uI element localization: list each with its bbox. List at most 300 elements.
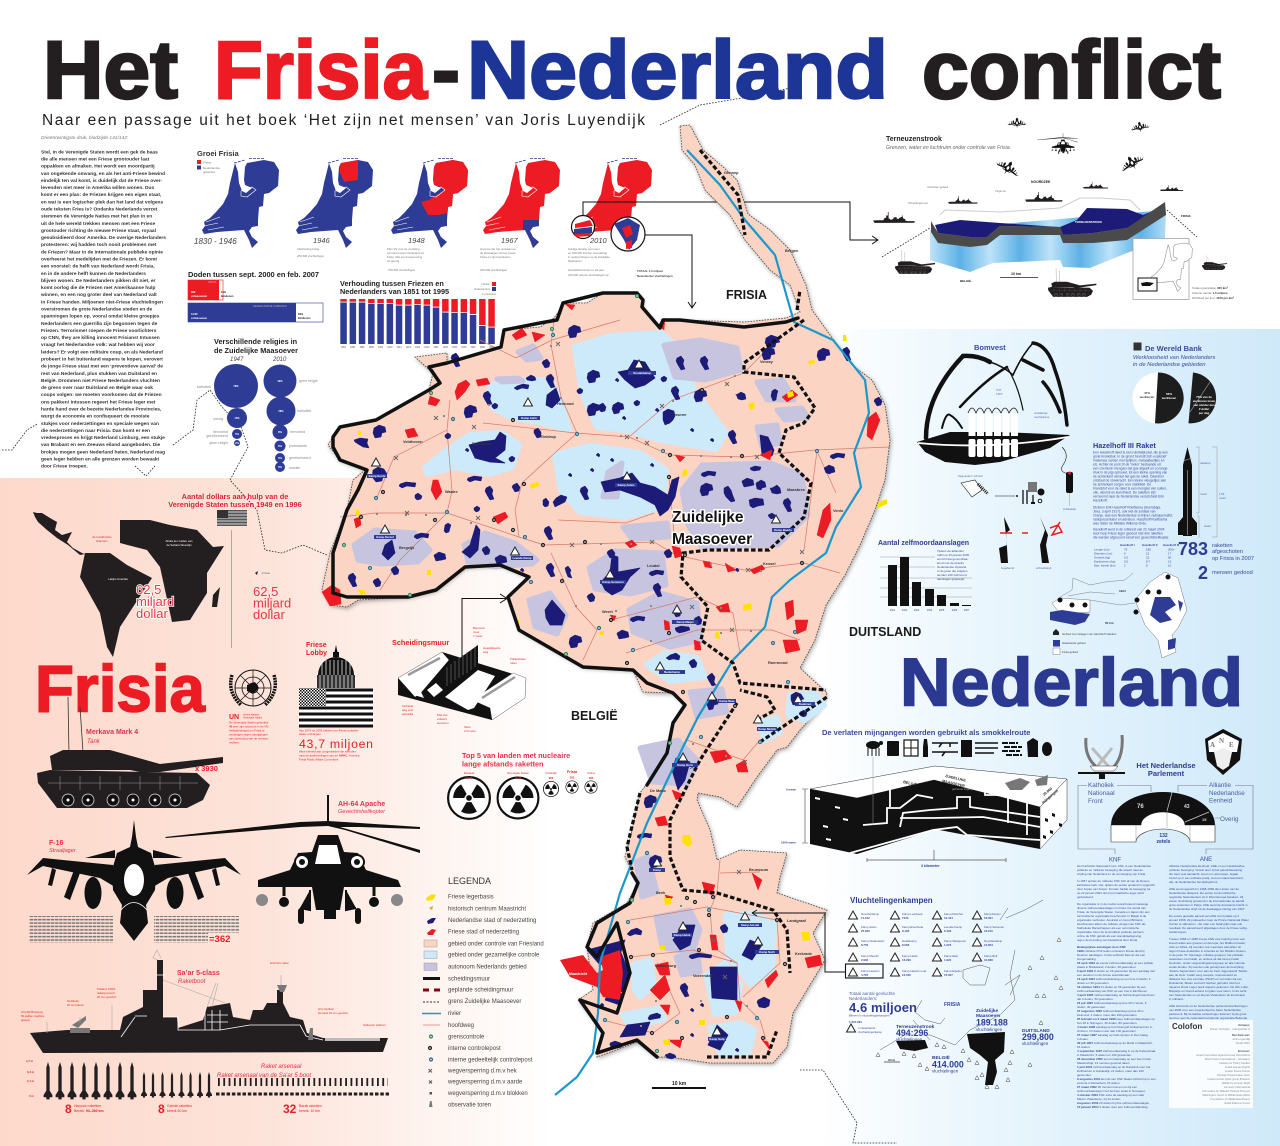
stat: Zuidelijke Maasoever: Maasoever: [976, 1013, 1001, 1019]
wall labels: sensoren: [437, 721, 449, 725]
table: rocket specs: 90: [1168, 556, 1172, 560]
label: UN: Verenigde Naties: [243, 716, 263, 720]
label 1967: de Zesdaagse Oorlog tussen: [480, 251, 516, 255]
text: KNF column: Maxim Vlaanderen, bij 21 doden.: [1077, 1097, 1121, 1101]
table: rocket specs: 6: [1124, 552, 1126, 556]
axis labels: 2007: [964, 609, 970, 612]
year axis: 1940: [452, 347, 458, 349]
text: ANE column: [1168, 864, 1249, 1020]
counts: missiles: bereik: 10 km: [299, 1109, 320, 1113]
chart: Aantal zelfmoordaanslagen: [878, 540, 972, 612]
year axis: 1990: [480, 347, 486, 349]
bubbles 1947: [214, 364, 258, 446]
bubble labels: gereformeerd: [289, 456, 311, 460]
subheading: unemployment: Werkloosheid van Nederlanders: [1133, 355, 1215, 361]
text: KNF column: 1989 militante KNF leden ontvoeren Friese duid bij: [1077, 949, 1145, 953]
stat: Zuidelijke Maasoever: [976, 1008, 1008, 1032]
ship callouts: helikopter platform: [363, 1023, 387, 1027]
text: ANE column: dat, de Nederlandse bevrijdingsfront.: [1169, 880, 1218, 884]
title: -: [432, 25, 460, 116]
heading: De Wereld Bank: De Wereld Bank: [1145, 344, 1203, 353]
label: UN: UN: [229, 714, 239, 721]
colofon text: Israeli Committee Against House Demolitions: [1196, 1053, 1251, 1057]
heading: Frisia side: Frisia: [35, 652, 206, 726]
camp names: Kamp Heerlen oud: [902, 969, 926, 973]
text: ANE column: grote studenten in Parijs. ANE werd de dominante kracht in: [1169, 903, 1248, 907]
city labels: Eindhoven: [472, 441, 493, 446]
year axis: 1881: [359, 347, 365, 349]
text: KNF column: vrijding van Nederland en de vernietiging van Frisia.: [1077, 872, 1146, 876]
strip: water column: [930, 210, 1166, 272]
road blocks: [376, 345, 762, 1027]
missile scale: 4,7 m: [26, 1059, 34, 1063]
year axis: 1861: [350, 347, 356, 349]
text: rocket description: grote brokkstuk. In de grond bevindt zich explosief: [1093, 454, 1166, 458]
text: KNF column: 6 april 1994 8 doden en 26 gewonden bij een aanslag met: [1077, 969, 1155, 973]
text block: passage from the book: en in de andere helft kunnen de Nederlanders: [41, 271, 146, 277]
bar: Frisia deaths: 960: [191, 290, 196, 294]
text: ANE column: ANE behoorde tot de Nederlandse parlementsverkiezingen: [1169, 1004, 1248, 1008]
title: Frisia: [214, 25, 428, 116]
autonomous Dutch areas: [354, 340, 808, 975]
camp names: 8.750: [861, 943, 869, 947]
stat: Terneuzenstrook: Terneuzenstrook: [896, 1024, 935, 1030]
label 2010: TOTAAL 4,6 miljoen: [637, 269, 664, 273]
refugee camps with tags: Kamp Melick: [758, 727, 776, 731]
party labels: Nederlandse: [1209, 790, 1245, 797]
icon: ANE shield: N: [1219, 737, 1224, 745]
column heads: [1109, 857, 1212, 864]
ship callouts: (2x) Oerlikon,: [318, 1007, 335, 1011]
block labels: ZUIDELIJKE: [945, 774, 967, 783]
text block: passage from the book: Friezen. Terrorisme! roepen de Friese voorlichters: [41, 328, 157, 334]
colofon text: Ruben Verheijen - rubenpletzer.nl: [1210, 1027, 1250, 1031]
text: UN veto: van schending van de mensen: [229, 736, 269, 740]
legend labels: wegversperring d.m.v aarde: [447, 1080, 523, 1086]
sketch map: black areas: [896, 1032, 1005, 1085]
city labels: Leudal: [647, 563, 660, 568]
strip facts: Inwoner aantal: 1.5 miljoen: [1192, 291, 1228, 295]
chart: unemployment pie: 53%: [1166, 392, 1172, 396]
table: rocket specs: Gewicht (kg): [1094, 556, 1110, 560]
map 1830-1946: [202, 158, 279, 248]
seat values: 76: [1137, 804, 1144, 810]
text: ANE column: resultaat. De aanval werd afgeslagen door de Friese veilig-: [1169, 926, 1247, 930]
sheep pointer: [872, 757, 874, 825]
table: rocket specs: 17: [1168, 552, 1172, 556]
bubble labels: gereformeerd: [206, 434, 228, 438]
block labels: [903, 774, 1059, 805]
camp names: 1.976: [944, 943, 952, 947]
country labels: [571, 288, 921, 723]
label: UN: United Nations: [243, 714, 260, 716]
heading: mine tunnels: De verlaten mijngangen worden gebruikt als smokkelroute: [822, 728, 1030, 737]
ship callouts: 20 mm geschut: [97, 995, 116, 999]
text: ANE column: steunen aan de nationaal bevrijdende organisatie Bekende: [1169, 1016, 1248, 1020]
heading: Hazelhoff: Hazelhoff III Raket: [1093, 441, 1156, 450]
party brackets: [1078, 786, 1253, 854]
text: rocket description: Een Hazelhoff raket is een ruimtelijk plat, die je een: [1093, 450, 1168, 454]
missiles: Harpoon: [44, 1062, 136, 1099]
label: F-16: F-16: [49, 840, 64, 847]
text: KNF column: gewonden.: [1077, 1073, 1092, 1077]
year axis: 1946: [470, 347, 476, 349]
left face windows: [815, 797, 848, 841]
total seats: 132: [1159, 833, 1168, 839]
text: KNF column: Augustus 2003 20 doden bij drie zelfmoordaanslagen.: [1077, 1101, 1150, 1105]
text: rocket description: etc. Achter de punt zit de 'motor' bestaande uit: [1093, 462, 1161, 466]
text: ANE column: waren vluchteling groeiend in de internationale op aantal: [1169, 899, 1244, 903]
refugee camps with tags: Swalmen: [799, 702, 811, 706]
value: 783 rockets: raketten: [1212, 543, 1233, 549]
text: rocket description: door hulp Friese leger gedood met drie raketten: [1093, 532, 1163, 536]
total seats: [1157, 833, 1171, 845]
diagram: left faces: [810, 789, 857, 854]
camp names: 25.800: [861, 929, 870, 933]
year axis: 1922: [415, 347, 421, 349]
camp names: 8.192: [902, 929, 910, 933]
text: ANE column: netwerken met Fatah, en andere uit dat Groep Fatah: [1169, 957, 1239, 961]
axis labels: 2004: [927, 609, 933, 612]
diagram: top surface: [810, 766, 1067, 807]
ship callouts: luchtruim radar: [270, 961, 289, 965]
year axis: 1931: [433, 347, 439, 349]
panel: Hazelhoff III Raket: [1093, 441, 1254, 583]
stat: Zuidelijke Maasoever: vluchtelingen: [976, 1027, 1003, 1032]
text: ANE column: Italiaans hun vice-centrale (JSOP) en van kolen bij een: [1169, 977, 1242, 981]
text: KNF column: plaats in Bretkeland; 2 doden, 28 gewonden.: [1077, 965, 1137, 969]
heading: Terneuzenstrook: Terneuzenstrook: [886, 136, 942, 143]
text: rocket description: die werden afgevuurd vanaf een gevechtshelikopter.: [1093, 536, 1169, 540]
text: KNF column: [1077, 864, 1156, 1109]
stat: Terneuzenstrook: [896, 1024, 935, 1042]
rocket dimension labels: [1200, 461, 1226, 528]
arrow: 2010 map to Terneuzenstrook: [583, 202, 878, 244]
text block: passage from the book: protesteren: wij hadden toch nooit problemen met: [41, 242, 157, 248]
value: 62,5 miljard dollar on map: 62,5: [136, 582, 161, 597]
refugee camps with tags: Kamp Horn: [677, 763, 693, 767]
refugee camps with tags: Kamp Eerde: [369, 474, 386, 478]
counts: missiles: 8: [65, 1102, 72, 1116]
legend: growth maps: [197, 160, 220, 174]
text: ANE column: 'Zwarte Septembers' voor aan de Kerk, bijgenaamd 'Stefan: [1169, 969, 1248, 973]
colofon text: Institute for Policy Studies: [1219, 1061, 1251, 1065]
heading: lobby: Lobby: [306, 650, 327, 657]
text: lobby outro: Frisia Public Affairs Committee.: [299, 758, 339, 762]
years: 2010: [272, 357, 287, 363]
text: KNF column: organisatie verboden. Australië en Groot Brittanië: [1077, 918, 1143, 922]
camp names: 1.920: [944, 958, 952, 962]
text block: passage from the book: oppakken en afmaken. Het wordt een moordpartij: [41, 164, 155, 170]
panel: Dutch parliament: [1077, 729, 1253, 1109]
city labels: Voerendaal: [693, 973, 714, 978]
map 1967: [483, 158, 560, 250]
bar: Frisia deaths: volwassenen: [191, 294, 208, 298]
panel: legend: [422, 876, 544, 1108]
labels: countries: 200: [570, 776, 575, 780]
party labels: Eenheid: [1209, 798, 1233, 804]
bar: Dutch deaths: kinderen: [298, 316, 311, 320]
tunnels: [850, 780, 1040, 853]
text block: passage from the book: coups volgen: we moeten voorkomen dat de Friezen: [41, 392, 162, 398]
text block: passage from the book: harde hand over de bezette Nederlandse Provincies,: [41, 406, 162, 412]
camp names: Kamp Wasspoon: [944, 939, 966, 943]
text: KNF column: De organisatie is in de media vooral bekend vanwege: [1077, 902, 1149, 906]
table: rocket specs: 15: [1146, 552, 1150, 556]
ship details: [121, 975, 323, 1040]
refugee camps with tags: Leende Kamp: [513, 556, 532, 560]
panel: Scheidingsmuur: [392, 594, 526, 733]
background: Nederland blue half: [820, 329, 1280, 1146]
planned wall: grens Zuidelijke Maasoever: [627, 150, 827, 1057]
bubble labels: geen religie: [299, 379, 318, 383]
rocket dimension brackets: [1196, 447, 1217, 538]
legend: ratio chart: in procenten: [482, 292, 497, 296]
colofon text: Studio NRC: [1236, 1041, 1250, 1045]
colofon text: Committee for Mideast Political Prisoner: [1202, 1089, 1250, 1093]
label: F-16: [49, 840, 77, 854]
colofon text: Amnesty International: [1224, 1085, 1250, 1089]
label 1948: Plan VN voor de verdeling: [387, 247, 420, 251]
heading: ratio chart: Verhouding tussen Friezen en: [340, 279, 444, 288]
bubble labels: protestants: [289, 444, 307, 448]
label 1946: [296, 236, 331, 258]
bubble labels: hervormd: [213, 430, 228, 434]
camp names: 8.066: [902, 943, 910, 947]
refugee camps with tags: Kamp Baarlo: [774, 528, 792, 532]
depth scale: [781, 788, 808, 844]
rocket dimension labels: 1,90: [1219, 492, 1225, 496]
camp names: 4.787: [861, 973, 869, 977]
text: ANE column: Nederlandse diaspora. De eerste communistische: [1169, 891, 1236, 895]
camp names: Kamp Meerlin: [861, 954, 879, 958]
arrow: wall to map: [462, 594, 507, 660]
Friese legerbasis (yellow): [356, 335, 887, 1045]
grenscontrole markers: [342, 294, 672, 1053]
diagram: end face: [1040, 779, 1067, 849]
diagram: wall cross-section: [398, 645, 526, 720]
city labels: Veldhoven: [403, 439, 423, 444]
camp names: 10.444: [944, 916, 953, 920]
camp names: [861, 912, 1004, 977]
camp names: 12.854: [984, 943, 993, 947]
stat: Terneuzenstrook: vluchtelingen: [896, 1037, 923, 1042]
label 1967: 260.000 vluchtelingen: [479, 268, 508, 272]
label 1967: Frisia en zijn buurlanden: [480, 255, 511, 259]
label: Merkava: Merkava Mark 4: [86, 729, 138, 736]
axis labels: [890, 609, 970, 612]
camp names: Kamp Heerlen: [861, 969, 880, 973]
camp names: Noordenkamp: [861, 912, 880, 916]
panel: Sa'ar 5 ship: [21, 950, 389, 1116]
colofon text: Israeli Human Rights: [1225, 1065, 1251, 1069]
city labels: Bergeijk: [399, 545, 415, 550]
map 1946: [296, 158, 373, 248]
city labels: Geldrop: [541, 434, 557, 439]
city labels: Kessel: [763, 561, 776, 566]
bubble labels: katholiek: [297, 409, 311, 413]
strip: outline of former area: [940, 198, 1140, 215]
legend: growth maps: Friese: [203, 160, 212, 164]
wall labels: Sloot: [464, 725, 471, 729]
colofon text: Christian Peacemaker team: [1217, 1073, 1251, 1077]
legend: ratio chart: [474, 282, 497, 296]
strip labels: NOORDZEE: [1031, 180, 1051, 184]
text: KNF column: Belangrijkste aanslagen door KNF: [1077, 945, 1126, 949]
heading: refugee camps: Vluchtelingenkampen: [850, 896, 933, 905]
party labels: [1088, 782, 1245, 823]
text: rocket description: Hazelhoff.: [1093, 498, 1108, 502]
icon: World Bank: [1134, 342, 1142, 350]
legend: ratio chart: Friezen: [481, 282, 491, 286]
bubble values: 78%: [233, 384, 239, 388]
label 1948: van land tussen Nederland en: [387, 251, 425, 255]
text: rocket description: Hazelhoff werd in de rubbrest van 22 maart 2004: [1093, 528, 1165, 532]
city labels: Bergen: [785, 248, 799, 253]
colofon text: Washington report of Middle East Affairs: [1202, 1093, 1251, 1097]
scale bar: 10 km: [1011, 272, 1021, 276]
colofon text: Foundation of Middle East Peace: [1210, 1097, 1251, 1101]
heading: ratio chart: [340, 279, 449, 296]
text: ANE column: ionale landen. Zij voerden ook geholpt aan de bevrijding.: [1169, 965, 1244, 969]
text block: passage from the book: van Brabant en een Zeeuws eiland aangeboden. Die: [41, 442, 161, 448]
note: [937, 549, 970, 581]
ship callouts: [21, 961, 387, 1027]
text: KNF column: 16 april 1993 de eerste zelfmoordaanslag op een politiek: [1077, 961, 1154, 965]
legend: rocket map: [1053, 629, 1117, 654]
city labels: De Maas: [650, 788, 666, 793]
text: KNF column: 9 augustus 2001 Een lid van KNF blaast zichzelf op in een: [1077, 1077, 1156, 1081]
text: rocket description: een chemisch mengsel dat gas afgeeft en zo lange: [1093, 466, 1168, 470]
legend labels: historisch centrum Maastricht: [448, 906, 526, 912]
text: lobby intro: akties ontvangen: [299, 732, 321, 736]
label 1967: Grenzen die zijn ontstaan na: [480, 247, 516, 251]
text block: passage from the book: blijven wonen. De Nederlanders pikken dit niet, er: [41, 278, 156, 284]
counts: missiles: bereik 60 km: [167, 1109, 187, 1113]
text: ANE column: politieke beweging. Vooral door zij het geloofsbewaring: [1169, 868, 1242, 872]
title: conflict: [922, 25, 1221, 116]
country labels: BELGIË: [571, 708, 618, 723]
counts: missiles: 8: [158, 1102, 165, 1116]
text: rocket description: radiopresentator en adviseur. Hazelhoff Roelfsema: [1093, 518, 1167, 522]
panel: Merkava tank: [37, 697, 223, 808]
text block: passage from the book: uit de hele wereld trekken mensen met een Friese: [41, 221, 155, 227]
wall labels: muur: [473, 630, 479, 634]
camp names: Kamp Eijsden: [944, 969, 962, 973]
years: [230, 357, 287, 363]
refugee camps with tags: Kamp Aarle: [521, 416, 537, 420]
table: rocket specs: Hazelhoff II: [1142, 543, 1158, 547]
bubble values: 6%: [278, 465, 283, 469]
heading: religions: Verschillende religies in: [214, 337, 297, 346]
refugee camps with tags: [367, 360, 815, 1041]
legend labels: gebied onder gezamelijke controle: [448, 953, 540, 959]
note: aanslagen gepleegd.: [937, 577, 965, 581]
party labels: Alliantie: [1209, 782, 1232, 789]
legend labels: geplande scheidingmuur: [448, 988, 513, 994]
bubble values: 6%: [278, 456, 283, 460]
text: KNF column: pizzeria in Rotterdam; 15 doden.: [1077, 1081, 1121, 1085]
bar: Dutch deaths: [188, 303, 323, 322]
camp names: Kamp Eleri: [944, 954, 958, 958]
bomb vest labels: ontstekings: [1034, 411, 1048, 415]
strip labels: [908, 180, 1192, 283]
note: werden 160 zelfmoord: [937, 573, 967, 577]
text: ANE column: tegen Friese doelwitten in Amerika en het Midden-Oosten.: [1169, 949, 1246, 953]
highlight box: [846, 964, 883, 978]
bars: blue Dutch share: [340, 302, 495, 344]
strip labels: Visgrone: [995, 189, 1006, 193]
chart: Verhouding tussen Friezen en Nederlanders: [340, 279, 497, 349]
bubble labels: overig: [213, 417, 223, 421]
camp names: Kamp Samener: [984, 925, 1004, 929]
jointly controlled areas: [425, 333, 824, 1055]
text: KNF column: 13 april 1994 zelfmoordaanslag op een bus in Harlin; 4: [1077, 977, 1151, 981]
text: KNF column: 4 maart 1996 aanslag op het Dizengoff winkelcentrum in: [1077, 1025, 1153, 1029]
table: rocket specs: 0,5: [1124, 560, 1128, 564]
camp names: Kamp Bolt: [984, 954, 998, 958]
icon: US flag small: [217, 510, 247, 526]
Frisian settlement towns: [322, 304, 880, 1050]
legend labels: wegversperring d.m.v hek: [447, 1068, 518, 1074]
map labels: 50 km: [1105, 621, 1114, 625]
map: Zuidelijke Maasoever: [322, 125, 890, 1095]
label 1948: 1948: [408, 236, 426, 245]
stat: Duitsland: vluchtelingen: [1022, 1041, 1049, 1046]
label: Frisia: FRISIA: [944, 1002, 961, 1008]
map 1948: [391, 158, 471, 248]
table: rocket specs: 8: [1146, 564, 1148, 568]
label: Apache: Gevechtshelikopter: [338, 809, 386, 815]
text: KNF column: 27 maart 2002 30 mensen komen om bij een: [1077, 1085, 1137, 1089]
map labels: Afrika ten zuiden van: [166, 539, 193, 543]
wall labels: Prikkeldraad: [510, 657, 526, 661]
icons: smuggled goods: [866, 738, 1052, 757]
label: gehaime ingang: geheime ingang: [952, 787, 973, 791]
text: lobby outro: Aktie behield aan congresleden die stemden: [299, 750, 356, 754]
subheading: Terneuzenstrook: Grenzen, water en luchtruim onder controle van Frisia.: [886, 145, 1011, 151]
small camp icons: [876, 938, 1063, 1088]
note: kend met de Israelis: [937, 561, 964, 565]
title: Het: [43, 25, 178, 116]
sketch map: IJsselmeer: [963, 965, 990, 985]
panel: Apache: [165, 795, 420, 924]
refugee camps with tags: Kamp Gulp: [709, 1037, 725, 1041]
table: rocket specs: Lengte (cm): [1094, 548, 1109, 552]
city labels: Kerkrade: [795, 951, 813, 956]
icon: capitol: [317, 645, 355, 688]
text: KNF column: Katholieke Manschappen als een terroristische: [1077, 926, 1140, 930]
text block: passage from the book: en wat is een logischer plek dan het land dat volgens: [41, 199, 164, 205]
heading: religions: de Zuidelijke Maasoever: [214, 346, 298, 355]
label 1967: [479, 236, 519, 272]
strip facts: Dichtheid per km²: 4156 per km²: [1192, 296, 1234, 300]
text block: passage from the book: ons pakken! Intussen regeert het Friese leger met: [41, 399, 156, 405]
column heads: ANE: [1200, 857, 1212, 863]
party labels: Nationaal: [1088, 790, 1115, 797]
text: KNF column: 21 augustus 1995 zelfmoordaanslag op bus 26 in: [1077, 1009, 1144, 1013]
legend labels: gebied onder controle van Friesland: [448, 941, 544, 947]
text: ANE column: Tussen 1968 en 1988 troupe ANE vele trainling leren een: [1169, 937, 1245, 941]
table: rocket specs: Hazelhoff I: [1120, 543, 1135, 547]
text: rocket description: brandstof voor de raket is een mengsel van suiker,: [1093, 486, 1167, 490]
count: plane grid: [29, 916, 240, 944]
strip labels: Verboden gebied: [927, 185, 949, 189]
text: rocket description: Dictionn Erik Hazelhoff Roelfsema (Soerabaja,: [1093, 506, 1161, 510]
text block: passage from the book: stukjes voor nederzettingen en speciale wegen van: [41, 421, 159, 427]
block labels: MAASOEVER: [942, 779, 966, 788]
text block: passage from the book: komt oorlog die de Friezen met Amerikaanse hulp: [41, 285, 156, 291]
